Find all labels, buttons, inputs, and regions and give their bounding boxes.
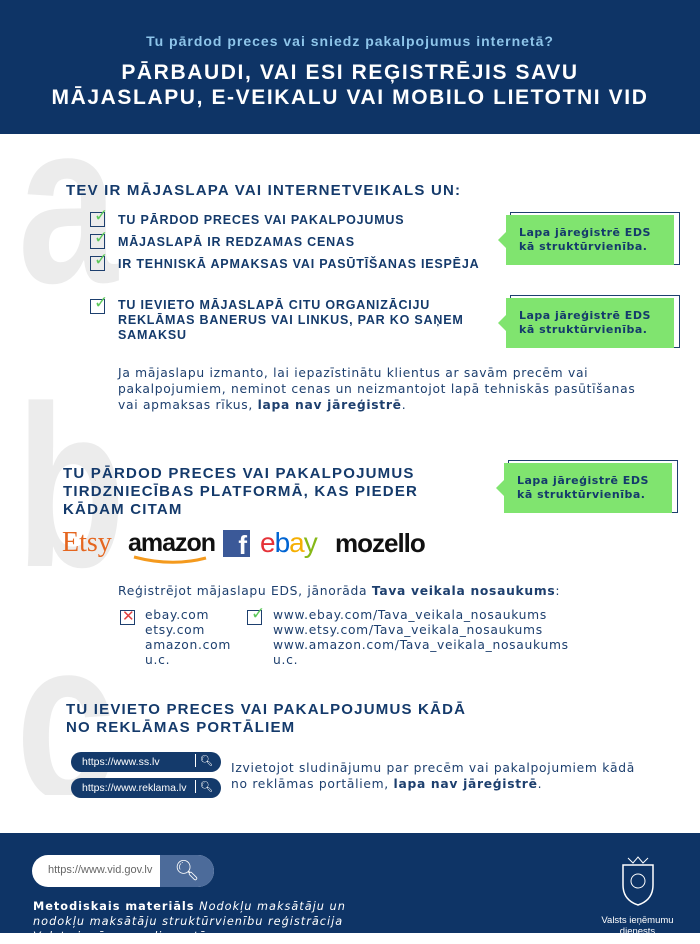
- footer text: Metodiskais materiāls Nodokļu maksātāju un: [33, 900, 346, 913]
- checklist a: TU IEVIETO MĀJASLAPĀ CITU ORGANIZĀCIJU: [118, 298, 430, 312]
- logo: [601, 856, 674, 937]
- callout 3: [496, 460, 678, 513]
- footer: [0, 833, 700, 933]
- logos: Etsy: [62, 527, 112, 558]
- heading c: NO REKLĀMAS PORTĀLIEM: [66, 719, 295, 736]
- footer search: https://www.vid.gov.lv: [48, 864, 152, 876]
- callout 3: Lapa jāreģistrē EDS: [517, 474, 649, 487]
- right examples: www.amazon.com/Tava_veikala_nosaukums: [273, 638, 569, 652]
- note c: [231, 761, 635, 791]
- callout 1: Lapa jāreģistrē EDS: [519, 226, 651, 239]
- callout 1: kā struktūrvienība.: [519, 240, 647, 253]
- search bars: 🔍︎: [200, 781, 213, 793]
- heading c: [66, 701, 466, 736]
- note c: no reklāmas portāliem, lapa nav jāreģistrē.: [231, 777, 542, 791]
- title: [52, 61, 648, 109]
- wrong examples: [120, 608, 231, 667]
- wrong examples: ebay.com: [145, 608, 209, 622]
- checklist a: ✓: [94, 206, 108, 225]
- footer text: Valsts ieņēmumu dienestā: [33, 930, 207, 943]
- checklist a: ✓: [94, 293, 108, 312]
- checklist a: SAMAKSU: [118, 328, 187, 342]
- checklist a: TU PĀRDOD PRECES VAI PAKALPOJUMUS: [118, 213, 404, 227]
- search bars: [71, 752, 221, 798]
- heading b: [63, 465, 418, 518]
- wrong examples: u.c.: [145, 653, 170, 667]
- right examples: www.etsy.com/Tava_veikala_nosaukums: [273, 623, 543, 637]
- logo: Valsts ieņēmumu dienests: [601, 915, 674, 937]
- callout 2: [498, 295, 680, 348]
- right examples: u.c.: [273, 653, 298, 667]
- note a: Ja mājaslapu izmanto, lai iepazīstinātu klientus ar savām precēm vai: [118, 366, 588, 380]
- heading c: TU IEVIETO PRECES VAI PAKALPOJUMUS KĀDĀ: [66, 701, 466, 718]
- logos: amazon: [128, 529, 215, 557]
- checklist a: REKLĀMAS BANERUS VAI LINKUS, PAR KO SAŅEM: [118, 313, 464, 327]
- logos: f: [238, 530, 247, 560]
- right examples: www.ebay.com/Tava_veikala_nosaukums: [273, 608, 547, 622]
- logos: ebay: [260, 527, 317, 558]
- search bars: https://www.ss.lv: [82, 756, 160, 768]
- wrong examples: ✕: [122, 608, 135, 625]
- heading b: KĀDAM CITAM: [63, 501, 183, 518]
- search bars: 🔍︎: [200, 755, 213, 767]
- note a: pakalpojumiem, neminot cenas un neizmantojot lapā tehniskās pasūtīšanas: [118, 382, 635, 396]
- callout 3: kā struktūrvienība.: [517, 488, 645, 501]
- search bars: https://www.reklama.lv: [82, 782, 186, 794]
- footer text: nodokļu maksātāju struktūrvienību reģistrācija: [33, 915, 343, 928]
- callout 1: [498, 212, 680, 265]
- checklist a: ✓: [94, 250, 108, 269]
- callout 2: kā struktūrvienība.: [519, 323, 647, 336]
- heading b: TIRDZNIECĪBAS PLATFORMĀ, KAS PIEDER: [63, 483, 418, 500]
- checklist a: [90, 206, 479, 342]
- wrong examples: amazon.com: [145, 638, 231, 652]
- footer search: 🔍︎: [174, 860, 200, 882]
- note c: Izvietojot sludinājumu par precēm vai pakalpojumiem kādā: [231, 761, 635, 775]
- logos: mozello: [335, 528, 425, 558]
- registration text: Reģistrējot mājaslapu EDS, jānorāda Tava veikala nosaukums:: [118, 584, 560, 598]
- checklist a: ✓: [94, 228, 108, 247]
- header: [0, 0, 700, 134]
- logos: [62, 527, 425, 564]
- heading a: TEV IR MĀJASLAPA VAI INTERNETVEIKALS UN:: [66, 182, 461, 199]
- right examples: [247, 604, 569, 667]
- letter b: b: [16, 358, 126, 615]
- wrong examples: etsy.com: [145, 623, 205, 637]
- footer search: [32, 855, 214, 887]
- title: PĀRBAUDI, VAI ESI REĢISTRĒJIS SAVU: [121, 61, 579, 84]
- callout 2: Lapa jāreģistrē EDS: [519, 309, 651, 322]
- subtitle: Tu pārdod preces vai sniedz pakalpojumus internetā?: [146, 33, 554, 49]
- note a: vai apmaksas rīkus, lapa nav jāreģistrē.: [118, 398, 406, 412]
- footer text: [33, 900, 346, 943]
- heading b: TU PĀRDOD PRECES VAI PAKALPOJUMUS: [63, 465, 415, 482]
- right examples: ✓: [251, 604, 265, 623]
- checklist a: IR TEHNISKĀ APMAKSAS VAI PASŪTĪŠANAS IESPĒJA: [118, 257, 479, 271]
- note a: [117, 366, 635, 412]
- checklist a: MĀJASLAPĀ IR REDZAMAS CENAS: [118, 235, 355, 249]
- title: MĀJASLAPU, E-VEIKALU VAI MOBILO LIETOTNI VID: [52, 86, 648, 109]
- letter a: a: [18, 74, 118, 331]
